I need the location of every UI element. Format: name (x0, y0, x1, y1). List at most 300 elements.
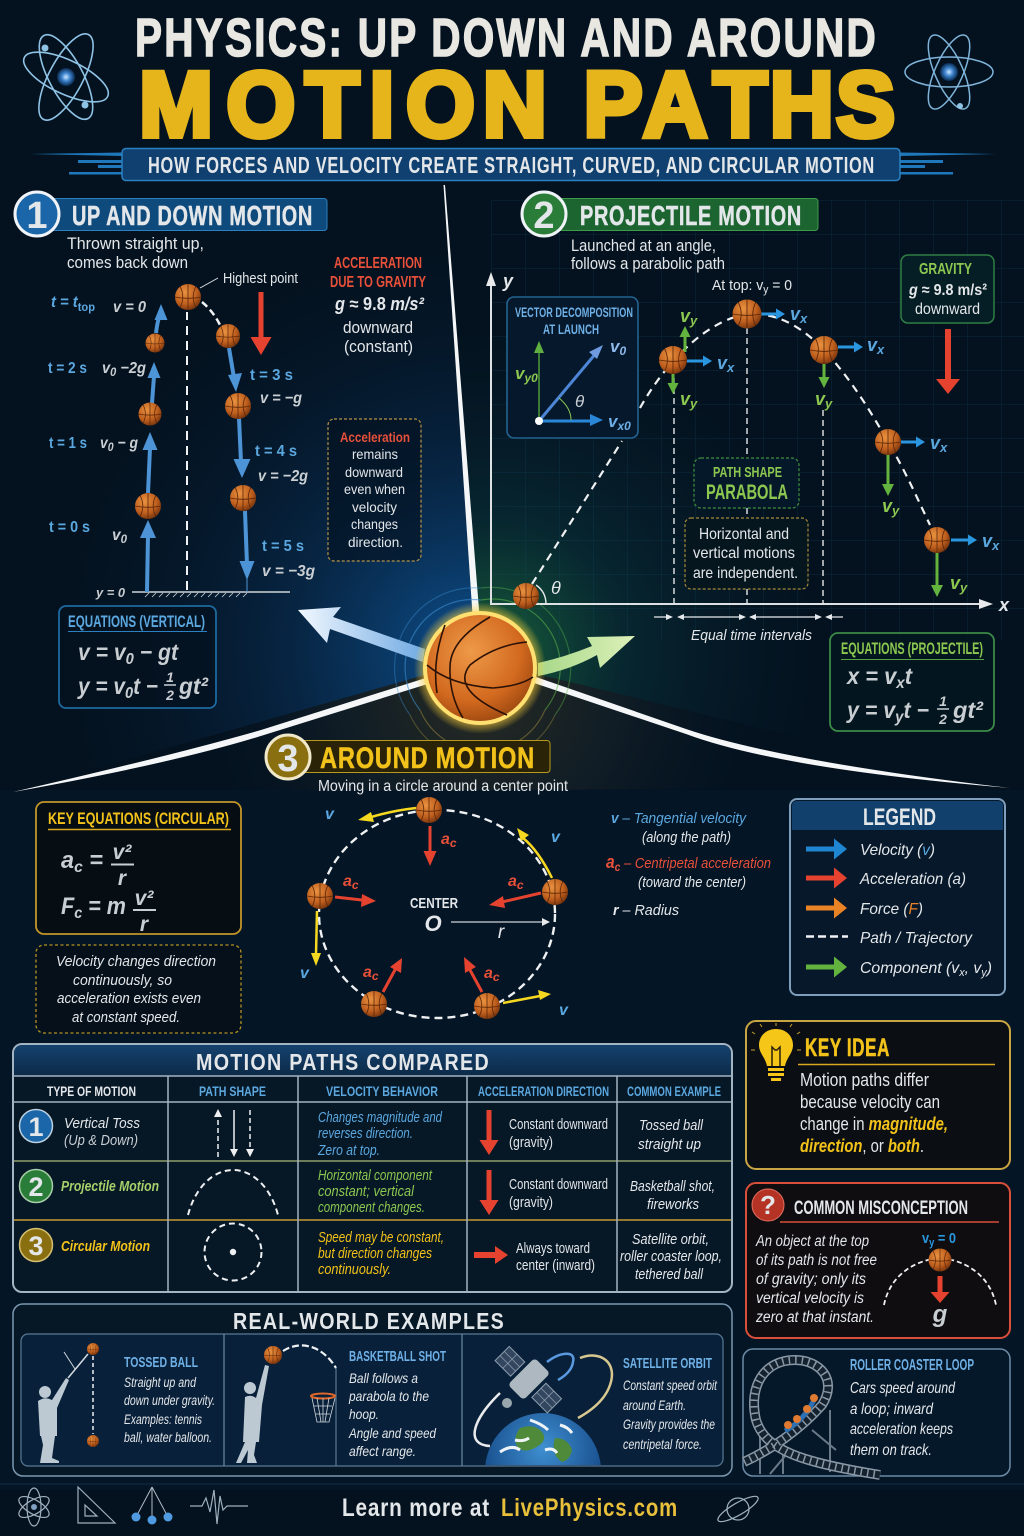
vector labels: c (450, 836, 457, 850)
section 3: around motion (36, 735, 1005, 1033)
time labels: t = 4 s (255, 443, 297, 460)
footer link text (342, 1494, 678, 1522)
heading: section 1 (15, 192, 327, 237)
footer link text: Learn more at (342, 1494, 490, 1522)
row 1: vertical toss: (Up & Down) (64, 1132, 138, 1149)
equations: vertical: EQUATIONS (VERTICAL) (68, 612, 205, 631)
panel: common misconception: An object at the top (755, 1233, 869, 1250)
vector labels: v (300, 965, 310, 982)
equations: vertical: 2 (165, 687, 174, 703)
text: section 1 intro: Thrown straight up, (67, 234, 204, 253)
time labels: top (78, 300, 95, 314)
vector labels: v (325, 806, 335, 823)
example: tossed ball: TOSSED BALL (124, 1354, 198, 1371)
launch angle: θ (551, 578, 561, 598)
vector labels: a (508, 873, 517, 890)
equations: projectile: gt² (952, 697, 984, 723)
icon: atom right (905, 30, 993, 114)
panel: key equations circular (36, 802, 241, 936)
equations: projectile: t − (903, 697, 929, 723)
example: basketball shot (236, 1345, 446, 1463)
velocity labels: v = −g (260, 390, 302, 407)
at top label: = 0 (768, 277, 792, 294)
icon: question mark: ? (760, 1190, 776, 1220)
time labels (48, 294, 304, 555)
highest point callout (200, 271, 298, 288)
equations: vertical (59, 606, 216, 708)
subtitle banner (30, 148, 996, 180)
panel: key equations circular: c (74, 905, 82, 922)
callout: velocity changes direction: Velocity changes direction (56, 953, 216, 970)
table header row (47, 1083, 721, 1099)
example: satellite orbit: around Earth. (623, 1397, 686, 1413)
row 3: circular motion (20, 1224, 722, 1283)
panel: key equations circular: = m (82, 893, 126, 920)
velocity labels: y = 0 (95, 585, 126, 600)
at top label: At top: v (712, 277, 767, 294)
callout: acceleration remains downward: downward (345, 464, 403, 480)
callout: independent motions: Horizontal and (699, 526, 789, 543)
acceleration due to gravity note: DUE TO GRAVITY (330, 274, 426, 291)
centre dashed guide (187, 302, 220, 590)
heading: section 3: AROUND MOTION (320, 742, 535, 775)
panel: key idea: Motion paths differ (800, 1070, 929, 1090)
legend item: velocity (806, 838, 935, 860)
row 1: vertical toss: (gravity) (509, 1135, 553, 1151)
text: symbol key: (along the path) (642, 829, 731, 846)
example: satellite orbit: SATELLITE ORBIT (623, 1355, 712, 1372)
velocity labels: v = −3g (262, 563, 315, 580)
callout: velocity changes direction: acceleration exists even (57, 990, 201, 1007)
example: basketball shot: affect range. (349, 1443, 416, 1459)
panel: vector decomposition: VECTOR DECOMPOSITION (515, 304, 633, 320)
vector labels: a (363, 964, 372, 981)
illustration: earth (485, 1413, 601, 1465)
velocity labels: 0 (108, 440, 114, 454)
icon: pendulum (132, 1487, 172, 1524)
equations: projectile: t (905, 663, 913, 689)
panel: key equations circular: v² (113, 841, 132, 864)
legend: LEGEND (863, 804, 936, 831)
panel: roller coaster loop (743, 1349, 1010, 1476)
row 1: vertical toss (20, 1109, 704, 1159)
panel: vector decomposition: θ (575, 392, 585, 411)
section 1: up and down motion (15, 192, 426, 708)
panel: key idea: KEY IDEA (805, 1034, 890, 1062)
row 1: vertical toss: Constant downward (509, 1117, 608, 1133)
vector labels: a (484, 965, 493, 982)
icon: atom left (17, 27, 115, 127)
section 2: projectile motion (486, 192, 1010, 731)
callout: velocity changes direction: at constant speed. (72, 1009, 180, 1026)
callout: acceleration remains downward: remains (352, 446, 398, 462)
centre and radius: O (424, 911, 442, 936)
panel: key equations circular: v² (135, 887, 154, 910)
example: basketball shot: hoop. (349, 1406, 379, 1422)
legend item: component: ) (985, 960, 992, 977)
panel: vector decomposition: 0 (619, 344, 626, 358)
text: section 2 intro: follows a parabolic path (571, 254, 725, 273)
vector labels on path: v (717, 353, 727, 373)
illustration: coaster (744, 1360, 880, 1475)
panel: common misconception: zero at that instant. (755, 1309, 874, 1326)
equations: vertical: t − (133, 673, 158, 699)
callout: velocity changes direction: continuously, so (73, 972, 172, 989)
trajectory chart (486, 271, 1010, 644)
vector labels: v (551, 829, 561, 846)
vector labels on path: v (930, 433, 940, 453)
time labels: t = 5 s (262, 538, 304, 555)
balls on orbit (307, 797, 568, 1019)
vector labels on path: v (680, 389, 690, 409)
legend item: component (806, 956, 992, 979)
row 2: projectile motion: fireworks (647, 1196, 699, 1213)
panel: key idea (746, 1021, 1010, 1169)
text: section 2 intro (571, 236, 725, 273)
equal time intervals: Equal time intervals (691, 627, 812, 644)
velocity labels: −2g (116, 360, 146, 377)
legend item: component: y (980, 967, 988, 979)
legend item: force: Force (F) (860, 901, 923, 918)
time labels: t = 1 s (49, 435, 87, 452)
callout: acceleration remains downward: direction. (348, 534, 403, 550)
equations: projectile: 2 (938, 711, 947, 727)
legend item: component: Component (v (860, 960, 960, 977)
panel: path shape parabola: PARABOLA (706, 481, 788, 504)
velocity labels: 0 (121, 532, 127, 546)
row 3: circular motion: center (inward) (516, 1258, 595, 1274)
panel: roller coaster loop: acceleration keeps (850, 1421, 953, 1438)
panel: key idea: direction, or both. (800, 1136, 924, 1156)
icon: question mark (752, 1189, 784, 1221)
panel: common misconception: vertical velocity is (756, 1290, 864, 1307)
heading: section 2: 2 (533, 195, 555, 237)
dashed path (532, 314, 930, 584)
equations: vertical: gt² (178, 673, 209, 699)
panel: key equations circular: = (83, 847, 103, 874)
axes: y (502, 271, 514, 291)
dashed orbit (319, 810, 555, 1018)
panel: key equations circular: F (61, 893, 76, 920)
panel: gravity: g ≈ 9.8 m/s² (908, 282, 987, 299)
equations: projectile: y (894, 709, 904, 726)
callout: acceleration remains downward: changes (351, 516, 398, 532)
title: MOTION PATHS (139, 53, 895, 156)
ground line (132, 592, 290, 597)
centre and radius: r (498, 922, 505, 943)
vector labels on path: v (790, 304, 800, 324)
row 3: circular motion: Satellite orbit, (632, 1231, 709, 1248)
row 3: circular motion: Always toward (516, 1241, 590, 1257)
panel: vector decomposition: v (608, 412, 617, 431)
example: basketball shot: BASKETBALL SHOT (349, 1348, 446, 1365)
launch angle (536, 578, 561, 604)
callout: velocity changes direction (36, 945, 241, 1033)
title (135, 8, 895, 156)
text: symbol key: v – Tangential velocity (611, 810, 747, 827)
at top label: y (763, 284, 769, 296)
row 2: projectile motion: Projectile Motion (61, 1178, 159, 1195)
heading: section 3: 3 (277, 738, 299, 780)
heading: section 1: 1 (26, 195, 48, 237)
vector labels on path: v (882, 496, 892, 516)
text: symbol key: c (615, 860, 621, 874)
velocity labels: v (102, 360, 111, 377)
equations: projectile: x = v (847, 663, 899, 689)
row 2: projectile motion: component changes. (318, 1200, 425, 1216)
centre and radius: CENTER (410, 895, 458, 912)
misconception diagram: g (932, 1301, 948, 1328)
arrow: to up-down section (298, 607, 425, 662)
row 2: projectile motion: Horizontal component (318, 1168, 433, 1184)
icon: planet (715, 1492, 761, 1526)
panel: vector decomposition: v (610, 337, 619, 356)
legend item: force (806, 898, 923, 918)
centre and radius (410, 895, 550, 943)
heading: section 2 (522, 192, 818, 237)
example: tossed ball (38, 1343, 215, 1463)
row 2: projectile motion: Basketball shot, (630, 1178, 715, 1195)
example: satellite orbit: Gravity provides the (623, 1416, 715, 1432)
legend item: path: Path / Trajectory (860, 930, 973, 947)
illustration: orbit (475, 1354, 612, 1446)
velocity arrows (140, 304, 254, 592)
icon: footer atom (16, 1488, 52, 1526)
text: section 3 intro: Moving in a circle around a center point (318, 778, 568, 795)
row 3: circular motion: Speed may be constant, (318, 1230, 444, 1246)
text: symbol key: – Centripetal acceleration (620, 855, 771, 872)
vector labels: c (517, 878, 524, 892)
vertical toss diagram (48, 271, 315, 600)
example: tossed ball: Straight up and (124, 1375, 196, 1390)
panel: key equations circular: KEY EQUATIONS (CIRCULAR) (48, 809, 229, 828)
velocity labels: v (100, 435, 109, 452)
vector labels on path: x (991, 538, 1000, 553)
velocity labels: v = −2g (258, 468, 308, 485)
equations: vertical: − gt (134, 639, 179, 665)
acceleration due to gravity note: ACCELERATION (334, 255, 422, 272)
velocity labels: 0 (110, 365, 117, 379)
panel: key idea: because velocity can (800, 1092, 940, 1112)
heading: section 3 (266, 735, 550, 780)
icon: wave (190, 1490, 248, 1524)
table header row: PATH SHAPE (199, 1083, 266, 1099)
table header row: VELOCITY BEHAVIOR (326, 1083, 438, 1099)
row 3: circular motion: but direction changes (318, 1246, 432, 1262)
velocity arrows (311, 808, 552, 1003)
vector labels on path: v (982, 531, 992, 551)
vector labels on path: x (939, 440, 948, 455)
vector labels on path: v (680, 306, 690, 326)
row 1: vertical toss: Tossed ball (639, 1117, 704, 1134)
panel: key equations circular: c (74, 859, 83, 876)
gravity arrow (250, 292, 272, 355)
balls (135, 284, 256, 519)
legend item: component: , v (965, 960, 982, 977)
table header row: COMMON EXAMPLE (627, 1083, 721, 1099)
vertical drop guides (674, 328, 823, 604)
axes (486, 271, 1010, 615)
vector labels: a (343, 873, 352, 890)
time labels: t = t (51, 294, 78, 311)
misconception diagram: = 0 (934, 1230, 956, 1247)
acceleration due to gravity note: (constant) (344, 337, 413, 356)
acceleration due to gravity note: g ≈ 9.8 m/s² (334, 294, 425, 314)
text: section 1 intro (67, 234, 204, 272)
panel: key equations circular: r (140, 913, 150, 936)
concentric rings (395, 587, 571, 761)
vector labels on path: y (959, 580, 968, 595)
equations: vertical: y = v (78, 673, 130, 699)
example: satellite orbit: centripetal force. (623, 1436, 702, 1452)
panel: common misconception (746, 1183, 1010, 1338)
heading: section 2: PROJECTILE MOTION (580, 200, 802, 231)
legend item: component: x (958, 967, 965, 979)
vector labels on path: x (726, 360, 735, 375)
central basketball with direction arrows (298, 587, 635, 761)
equations: vertical: 0 (126, 651, 134, 668)
equations: vertical: v = v (78, 639, 130, 665)
panel: gravity: downward (915, 301, 980, 318)
vector labels on path: y (689, 396, 698, 411)
vector labels: c (372, 969, 379, 983)
legend item: velocity: Velocity (v) (860, 842, 935, 859)
example: basketball shot: parabola to the (348, 1388, 429, 1404)
icon: set square (78, 1487, 115, 1523)
callout: independent motions: are independent. (693, 565, 798, 582)
row 3: circular motion: roller coaster loop, (620, 1248, 722, 1265)
row 1: vertical toss: reverses direction. (318, 1126, 413, 1142)
basketball (425, 613, 535, 723)
panel: gravity: GRAVITY (919, 261, 972, 278)
callout: acceleration remains downward: velocity (352, 499, 397, 515)
example: tossed ball: ball, water balloon. (124, 1430, 212, 1445)
arrow: to projectile section (538, 636, 635, 676)
row 2: projectile motion: 2 (28, 1172, 44, 1202)
vector labels: c (493, 970, 500, 984)
panel: vector decomposition: x0 (616, 419, 631, 433)
row 1: vertical toss: Zero at top. (317, 1143, 380, 1159)
example: basketball shot: Ball follows a (349, 1370, 418, 1386)
callout: acceleration remains downward: Acceleration (340, 429, 410, 445)
acceleration arrows (335, 826, 541, 992)
legend item: acceleration (806, 868, 966, 888)
vector labels on path: v (815, 389, 825, 409)
heading: section 1: UP AND DOWN MOTION (72, 200, 313, 231)
panel: common misconception: of its path is not free (756, 1252, 877, 1269)
equations: vertical: 0 (125, 685, 133, 702)
acceleration due to gravity note (330, 255, 426, 356)
callout: independent motions: vertical motions (693, 545, 795, 562)
panel: path shape parabola (694, 458, 799, 508)
highest point callout: Highest point (223, 271, 298, 287)
equations: projectile: x (895, 675, 906, 692)
row 1: vertical toss: 1 (28, 1112, 44, 1142)
icon: light bulb (751, 1023, 801, 1081)
row 2: projectile motion (20, 1168, 715, 1216)
vector labels: a (441, 831, 450, 848)
panel: roller coaster loop: them on track. (850, 1442, 932, 1459)
example: basketball shot: Angle and speed (348, 1425, 437, 1441)
table header row: TYPE OF MOTION (47, 1083, 136, 1099)
text: symbol key: (toward the center) (638, 874, 746, 891)
example: satellite orbit (473, 1346, 718, 1465)
axes: x (998, 595, 1010, 615)
velocity labels: − g (114, 435, 138, 452)
illustration: satellite (489, 1339, 569, 1419)
example: satellite orbit: Constant speed orbit (623, 1377, 718, 1393)
misconception diagram: y (929, 1237, 935, 1249)
velocity labels (95, 299, 315, 600)
row 3: circular motion: 3 (28, 1231, 44, 1261)
table title: MOTION PATHS COMPARED (196, 1049, 490, 1075)
panel: common misconception: of gravity; only its (756, 1271, 866, 1288)
callout: acceleration remains downward (328, 419, 421, 561)
text: symbol key: r – Radius (613, 902, 679, 919)
heading: real-world examples: REAL-WORLD EXAMPLES (233, 1308, 505, 1334)
vector labels on path: v (950, 573, 960, 593)
panel: vector decomposition: v (515, 364, 524, 383)
text: section 1 intro: comes back down (67, 253, 188, 272)
panel: key equations circular: r (118, 867, 128, 890)
panel: vector decomposition (507, 297, 638, 438)
misconception diagram (884, 1230, 996, 1328)
row 1: vertical toss: straight up (638, 1136, 701, 1153)
time labels: t = 2 s (48, 360, 87, 377)
panel: roller coaster loop: a loop; inward (850, 1401, 934, 1418)
panel: vector decomposition: y0 (523, 371, 538, 385)
panel: key idea: change in magnitude, (800, 1114, 948, 1134)
panel: gravity (901, 255, 994, 323)
footer (0, 1484, 1024, 1526)
balls on path (513, 300, 950, 609)
example: tossed ball: Examples: tennis (124, 1412, 202, 1427)
vector labels on path: y (689, 313, 698, 328)
row 1: vertical toss: Vertical Toss (64, 1115, 140, 1132)
panel: real-world examples (12, 1303, 733, 1477)
equations: projectile: y = v (847, 697, 899, 723)
vector labels on path: y (824, 396, 833, 411)
callout: acceleration remains downward: even when (344, 481, 405, 497)
row 2: projectile motion: Constant downward (509, 1177, 608, 1193)
velocity labels: v (112, 527, 121, 544)
velocity labels: v = 0 (113, 299, 146, 316)
equal time intervals (654, 614, 843, 644)
vector labels on path: x (876, 342, 885, 357)
panel: key equations circular: a (61, 847, 74, 874)
time labels: t = 0 s (49, 519, 90, 536)
vector labels: v (559, 1002, 569, 1019)
legend (790, 799, 1005, 995)
callout: independent motions (685, 518, 808, 589)
legend item: acceleration: Acceleration (a) (859, 871, 966, 888)
footer link text: LivePhysics.com (501, 1494, 678, 1522)
table header row: ACCELERATION DIRECTION (478, 1083, 609, 1099)
time labels: t = 3 s (250, 367, 293, 384)
row 2: projectile motion: constant; vertical (318, 1184, 415, 1200)
example: tossed ball: down under gravity. (124, 1393, 215, 1408)
panel: vector decomposition: AT LAUNCH (543, 321, 599, 337)
vector labels on path (680, 304, 1000, 595)
circular motion diagram (300, 797, 569, 1019)
text: section 2 intro: Launched at an angle, (571, 236, 716, 255)
sector divider lines (13, 185, 1010, 792)
table: motion paths compared (13, 1044, 732, 1292)
row 3: circular motion: continuously. (318, 1262, 391, 1278)
row 1: vertical toss: Changes magnitude and (318, 1110, 443, 1126)
table grid (14, 1076, 731, 1291)
vector labels: c (352, 878, 359, 892)
